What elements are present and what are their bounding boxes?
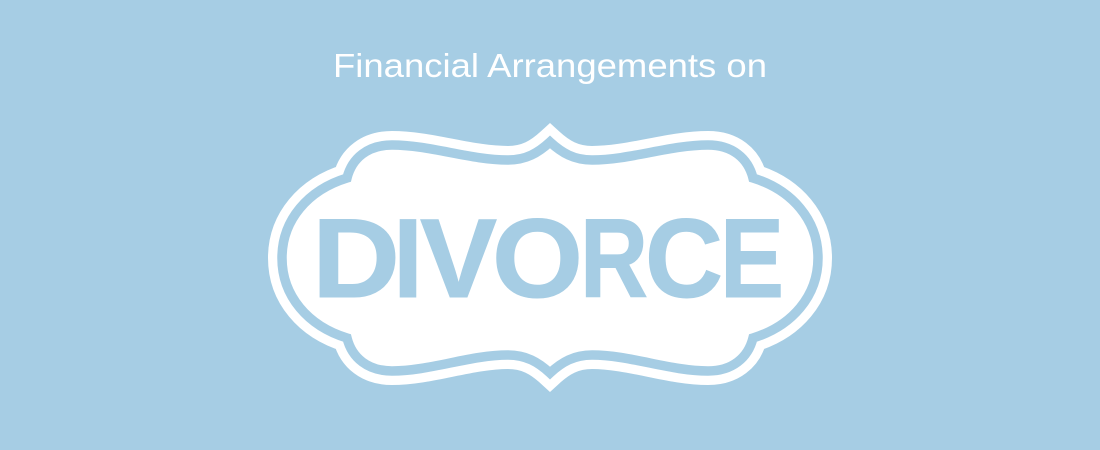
heading: DIVORCE: O [492, 196, 583, 321]
heading: DIVORCE: V [420, 196, 497, 321]
heading: DIVORCE: R [580, 196, 648, 321]
heading: DIVORCE: I [393, 196, 423, 321]
heading: DIVORCE [312, 196, 784, 321]
heading: DIVORCE: C [645, 196, 723, 321]
badge: decorative plaque frame [282, 142, 818, 373]
heading: DIVORCE: D [312, 196, 400, 321]
title: Financial Arrangements on [333, 47, 767, 84]
heading: DIVORCE: E [720, 196, 784, 321]
